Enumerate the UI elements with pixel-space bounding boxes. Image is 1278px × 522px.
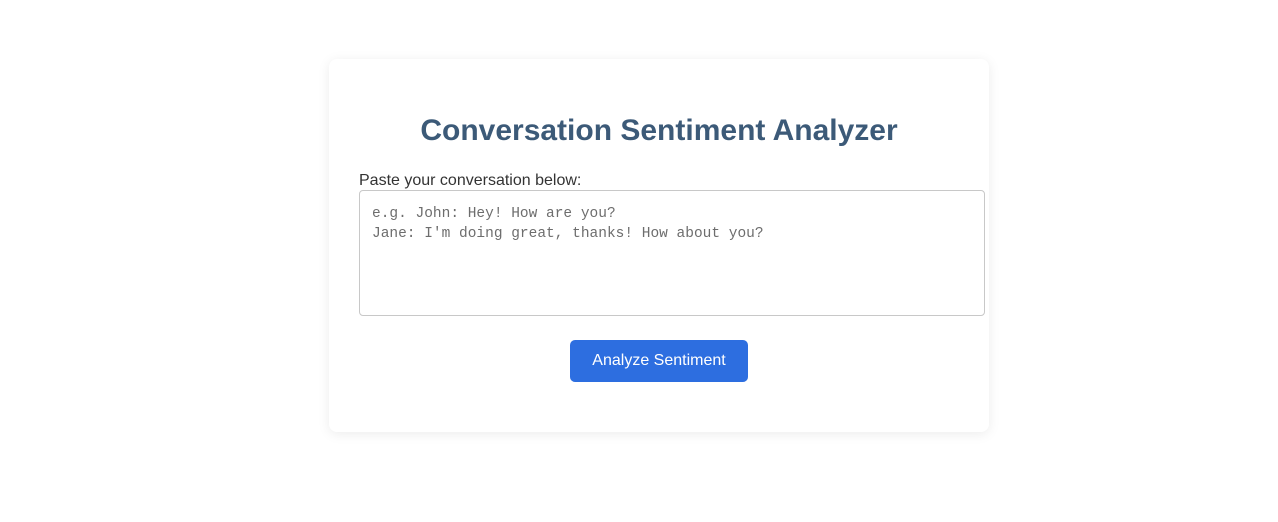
textarea bbox=[359, 190, 985, 316]
button: analyze: Analyze Sentiment bbox=[592, 352, 726, 369]
panel: card bbox=[329, 59, 989, 432]
title: Conversation Sentiment Analyzer bbox=[420, 114, 898, 147]
input label: Paste your conversation below: bbox=[359, 172, 581, 189]
button: analyze bbox=[570, 340, 748, 382]
textarea: e.g. John: Hey! How are you? Jane: I'm doing great, thanks! How about you? bbox=[372, 206, 764, 242]
